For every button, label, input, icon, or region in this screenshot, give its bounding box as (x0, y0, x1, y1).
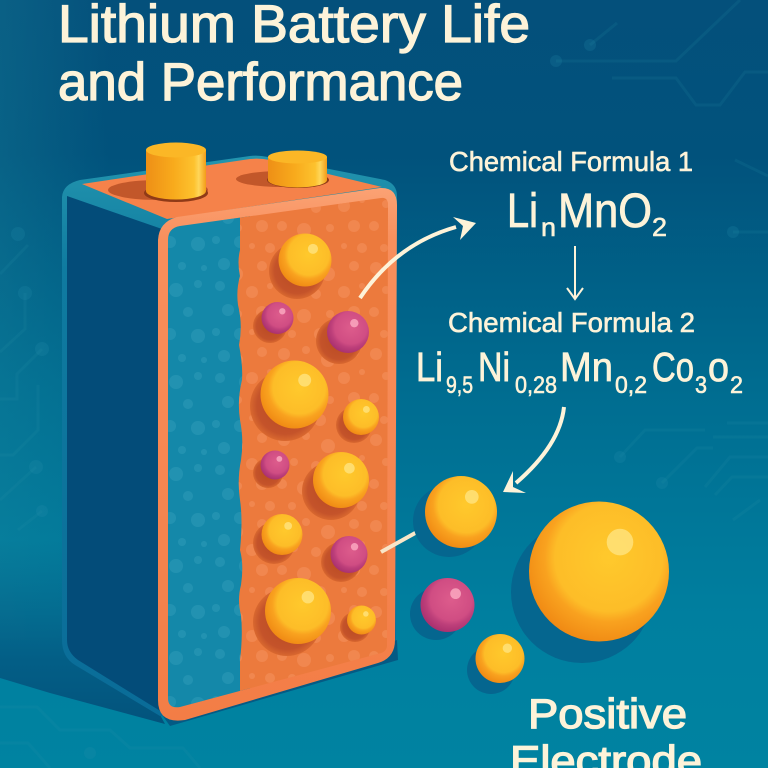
separator layer: blue (165, 190, 250, 715)
arrow between formulas (567, 246, 583, 299)
formula 2: 0,28 (515, 372, 557, 399)
free particle: yellow small (467, 634, 524, 694)
particle: yellow 5 (262, 514, 302, 555)
formula 2: o (708, 344, 729, 390)
title (58, 0, 530, 112)
particle: yellow 1 (278, 234, 332, 286)
formula 1: 2 (652, 212, 667, 242)
particle: magenta 1 (262, 302, 294, 334)
particle: yellow 6 (265, 578, 331, 644)
formula 2: 0,2 (615, 372, 647, 399)
free particle: yellow large (511, 502, 669, 663)
formula 1 heading: Chemical Formula 1 (449, 146, 693, 177)
formula 2: 3 (695, 372, 707, 399)
formula 2: 9,5 (446, 372, 473, 399)
title: and Performance (58, 53, 463, 112)
particle shadows in cathode (250, 243, 372, 656)
formula 2: 2 (730, 372, 743, 399)
particle: yellow 3 (343, 399, 379, 435)
terminal: left (144, 142, 208, 202)
particle: yellow 4 (313, 452, 369, 508)
formula 2: Co (652, 344, 694, 390)
formula 2: Mn (560, 344, 613, 390)
battery illustration (62, 142, 398, 726)
formula 2: Ni (478, 344, 510, 390)
formula 1 (507, 185, 667, 242)
battery cross-section (165, 190, 392, 715)
free particle: magenta (410, 578, 474, 640)
formula 2 (416, 344, 743, 399)
positive electrode label (510, 690, 702, 768)
particle: yellow 7 (347, 606, 376, 634)
battery top face (82, 159, 382, 219)
battery underside shadow (160, 640, 398, 726)
terminal: right (267, 150, 329, 188)
particle: magenta 4 (330, 536, 368, 573)
positive electrode label: Positive (528, 690, 687, 737)
particle: magenta 3 (260, 450, 290, 480)
formula 1: Li (507, 185, 538, 238)
formula 1: n (541, 212, 556, 242)
particle: magenta 2 (327, 311, 369, 353)
particle: yellow 2 (260, 360, 328, 428)
battery dark side face (67, 196, 162, 712)
battery side body (62, 156, 397, 718)
cathode layer: orange (237, 190, 392, 715)
free particle: yellow medium (413, 476, 497, 557)
formula 1: MnO (558, 185, 652, 238)
battery front frame (158, 188, 397, 721)
curved arrow to particle (503, 407, 564, 493)
terminal shadows (108, 171, 328, 200)
formula 2: Li (416, 344, 443, 390)
curved arrow to formula 1 (360, 217, 476, 298)
connector line to particles (381, 532, 417, 552)
formula 2 heading: Chemical Formula 2 (448, 307, 695, 338)
battery ground shadow (0, 540, 165, 724)
